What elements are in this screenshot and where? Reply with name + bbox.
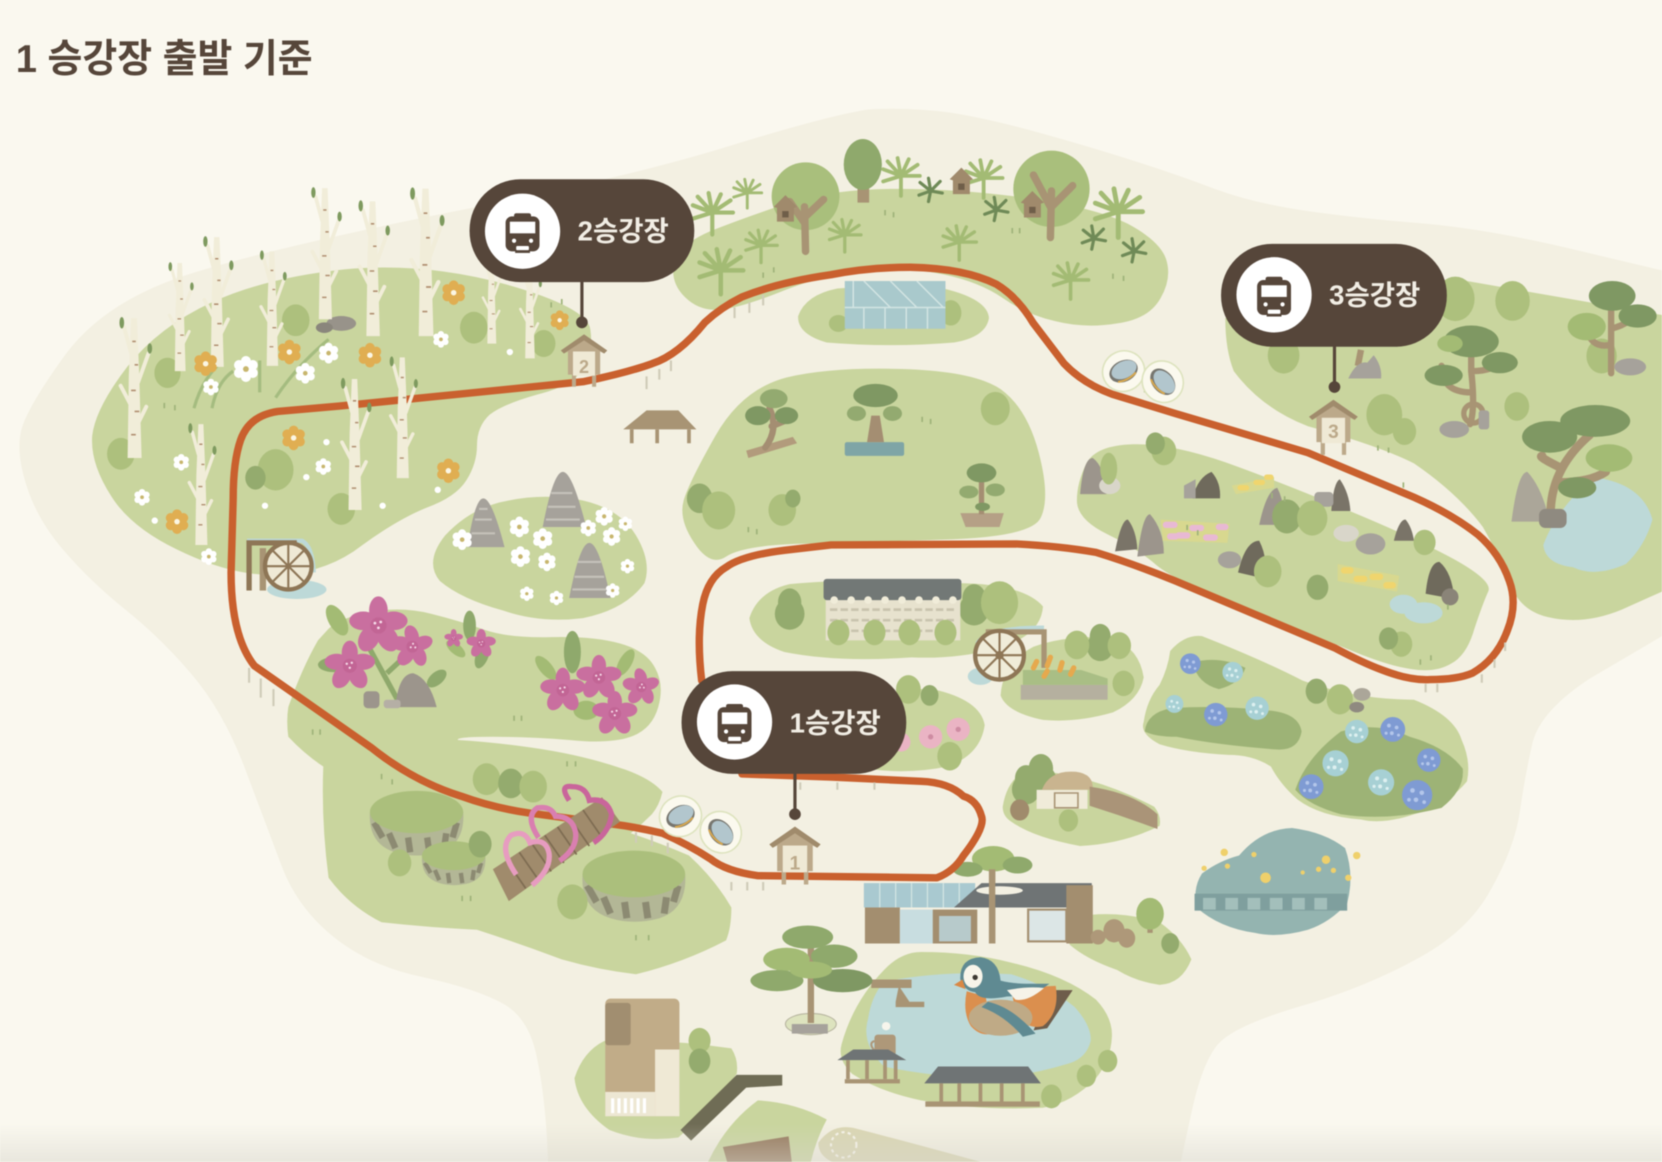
- shrubs: [687, 392, 1010, 529]
- main visitor building: [864, 846, 1093, 944]
- stone cairns: [467, 472, 611, 598]
- firefly garden details: [1195, 849, 1360, 911]
- small pavilion: [837, 1049, 906, 1083]
- pine with twisted trunk: [1425, 326, 1518, 424]
- dark ferns: [919, 178, 1146, 262]
- azalea rocks: [364, 673, 437, 708]
- firefly garden teal island: [1195, 828, 1350, 935]
- small ponds: [1390, 595, 1443, 623]
- bonsai in clay pot: [959, 463, 1005, 527]
- huts: [774, 168, 1044, 222]
- blooms: [1165, 653, 1441, 810]
- callout: platform 1: [682, 671, 906, 820]
- tropical hill plants: [693, 139, 1146, 299]
- tree: conifer: [844, 139, 882, 203]
- rocks: [1439, 358, 1646, 528]
- duck pond: [837, 957, 1117, 1108]
- large pine with plaque: [750, 925, 872, 1035]
- walls and windows: [865, 869, 1093, 944]
- pond water: [866, 973, 1091, 1078]
- large pavilion: [924, 1066, 1041, 1107]
- birch trees: [119, 187, 542, 545]
- green garden islands: [92, 189, 1662, 1162]
- shrubs: [1041, 1050, 1117, 1108]
- pine above pond: [1522, 405, 1632, 509]
- leaves and stems: [318, 601, 638, 720]
- tree trunk beneath platform 3: [1348, 350, 1381, 379]
- deck: [871, 980, 924, 1007]
- meadow flowers: [134, 280, 569, 565]
- water wheel: [975, 628, 1044, 680]
- blue glass roof: [864, 883, 975, 907]
- rest pavilion: [623, 410, 696, 443]
- shrubs by bridge: [388, 763, 588, 919]
- cable cars: [653, 344, 1192, 861]
- tan plaza at bottom: [818, 1127, 980, 1162]
- flower bed wall: [1021, 657, 1108, 700]
- callout: platform 2: 2승강장: [578, 216, 669, 247]
- greenhouse: [829, 281, 961, 332]
- pink flower garden: [891, 675, 970, 771]
- callout: platform 3: 3승강장: [1329, 279, 1420, 310]
- trees: [1065, 624, 1135, 696]
- bottom-right dotted circle: [831, 1132, 856, 1158]
- station marker 2: [561, 334, 607, 387]
- pine top right: [1568, 281, 1657, 373]
- station marker 3: 3: [1328, 422, 1339, 443]
- flower beds: [1161, 477, 1399, 592]
- shrubs and rocks: [1306, 679, 1371, 714]
- heart bridge: [493, 786, 620, 901]
- shrubs: [775, 581, 1018, 630]
- azalea garden: [318, 596, 665, 737]
- hanok wall garden: [775, 579, 1018, 645]
- stone circle gardens: [370, 791, 685, 922]
- mug on pavilion: [871, 1022, 896, 1056]
- bonsai in teal pot: [845, 384, 904, 456]
- station marker 1: 1: [790, 853, 801, 874]
- callout: platform 1: 1승강장: [790, 708, 881, 739]
- leafy beds: [1145, 660, 1463, 817]
- tree: right deciduous: [1013, 151, 1090, 238]
- shrubs: [1268, 277, 1617, 445]
- rock garden shrubs: [1146, 432, 1436, 657]
- title: 1 승강장 출발 기준: [16, 38, 313, 81]
- pine: [953, 846, 1032, 944]
- hydrangea garden: [1145, 653, 1463, 817]
- bushes at wall: [827, 620, 956, 645]
- station marker 1: [769, 827, 821, 884]
- dark wooden walkway: [680, 1075, 782, 1141]
- pink blooms: [325, 596, 665, 737]
- wall: [826, 598, 960, 640]
- thatched cottage: [1010, 754, 1157, 832]
- grass ticks: [164, 210, 1448, 940]
- pool: [968, 668, 993, 685]
- station marker 3: [1309, 400, 1358, 455]
- birch forest ground plants: [107, 304, 555, 525]
- bottom-left tan building: [605, 999, 711, 1116]
- pond: [1543, 478, 1652, 572]
- wooden bench at bottom: [723, 1136, 792, 1162]
- railway track route: [231, 267, 1513, 878]
- dark roof: [954, 883, 1092, 907]
- tree: left deciduous: [772, 162, 839, 251]
- palms: [693, 158, 1143, 299]
- mandarin duck: [954, 957, 1073, 1037]
- pine garden: [1268, 277, 1657, 572]
- bottom fade: [0, 1124, 1662, 1162]
- left waterwheel: [247, 541, 326, 599]
- pink hearts: [506, 786, 612, 885]
- cairn flowers: [453, 507, 634, 605]
- rocks: [1080, 453, 1458, 605]
- bonsai garden: [687, 384, 1010, 529]
- rock garden: [1080, 432, 1458, 657]
- track support ticks: [249, 295, 1505, 891]
- right waterwheel garden: [968, 624, 1135, 700]
- station marker 2: 2: [579, 357, 589, 377]
- bonsai with rock: [745, 389, 798, 458]
- jars and small tree: [1091, 898, 1179, 954]
- callout: platform 3: [1221, 244, 1447, 393]
- callout: platform 2: [470, 179, 694, 328]
- tiled roof: [824, 579, 961, 604]
